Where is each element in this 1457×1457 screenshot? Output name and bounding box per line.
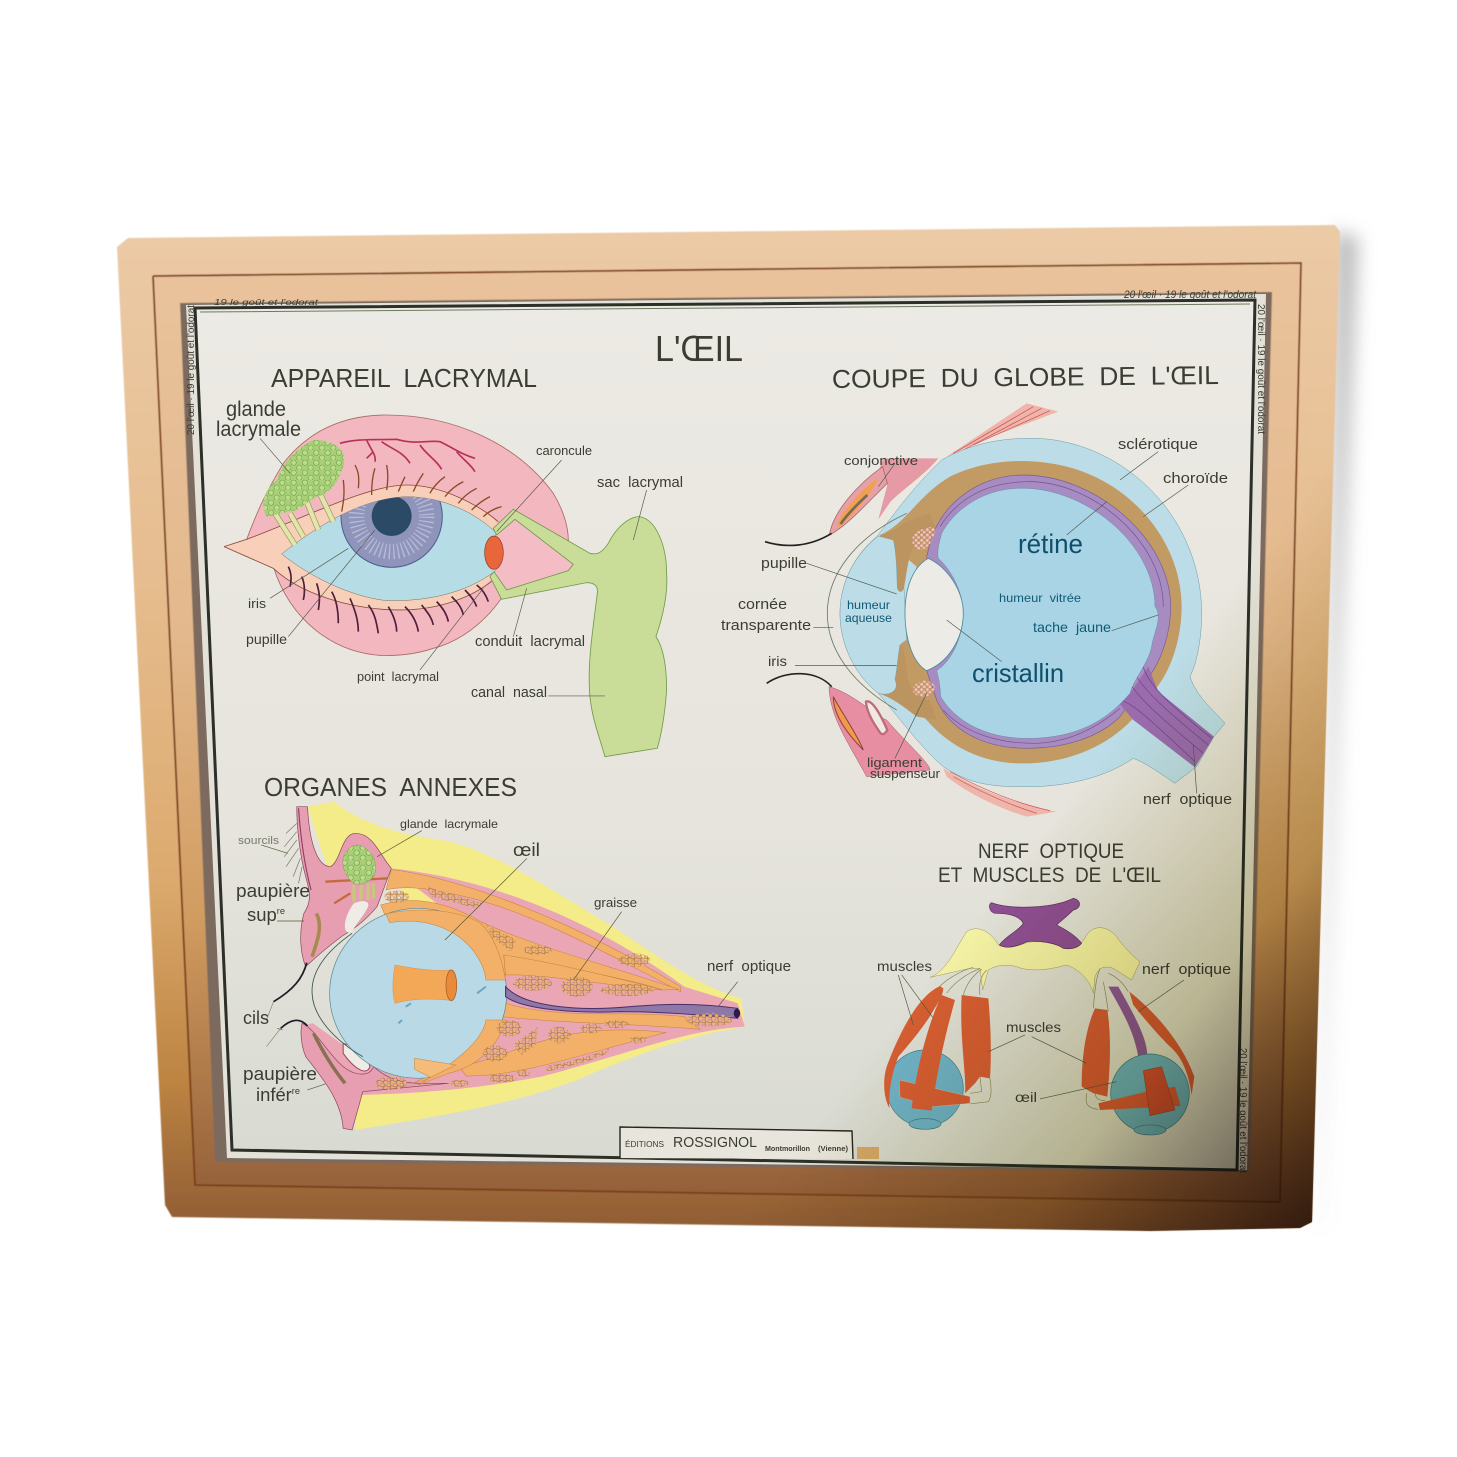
publisher box <box>620 1127 853 1159</box>
heading: nerf optique et muscles de l'oeil: ET MUSCLES DE L'ŒIL <box>938 864 1161 887</box>
label: caroncule: caroncule <box>536 444 592 458</box>
icon: caruncle <box>485 536 503 569</box>
leader lines <box>261 831 738 1090</box>
label: humeur aqueuse: aqueuse <box>845 611 892 625</box>
label: sac lacrymal: sac lacrymal <box>597 474 683 491</box>
publisher box: ROSSIGNOL <box>673 1134 757 1151</box>
label: paupiere sup: re <box>277 906 285 916</box>
label: ligament suspenseur: ligament <box>867 755 922 770</box>
label: nerf optique: nerf optique <box>1143 791 1232 808</box>
label: ligament suspenseur: suspenseur <box>870 766 941 781</box>
cornea line <box>827 513 907 710</box>
label: paupiere sup: sup <box>247 905 276 925</box>
lower eyelashes <box>288 567 488 633</box>
lighting overlay <box>796 521 1332 1231</box>
label: cils: cils <box>243 1008 269 1028</box>
frame shadow <box>1314 230 1358 1225</box>
label: tache jaune: tache jaune <box>1033 619 1111 635</box>
label: glande lacrymale: glande lacrymale <box>400 817 498 831</box>
sclera <box>840 438 1225 787</box>
orbital fat yellow <box>307 802 745 1130</box>
diagram: orbit section <box>261 802 745 1130</box>
blood vessels <box>340 439 475 472</box>
margin text: sides: 20 l'œil · 19 le goût et l'odorat <box>186 305 197 435</box>
label: nerf optique: nerf optique <box>707 959 791 975</box>
label: conjonctive: conjonctive <box>844 453 918 468</box>
label: choroide: choroïde <box>1163 470 1228 487</box>
heading: coupe du globe: COUPE DU GLOBE DE L'ŒIL <box>832 360 1219 394</box>
label: canal nasal: canal nasal <box>471 685 547 701</box>
label: cornee transparente: cornée <box>738 596 787 613</box>
lower eyelid <box>767 674 930 777</box>
label: humeur aqueuse <box>845 598 892 625</box>
adhesive tape scrap <box>857 1147 879 1159</box>
leader lines <box>260 438 647 696</box>
margin text: sides: 20 l'œil · 19 le goût et l'odorat <box>1237 1048 1248 1173</box>
upper lid tissue <box>297 807 391 967</box>
label: graisse: graisse <box>594 895 637 910</box>
optic nerve <box>1113 667 1214 767</box>
aqueous humour <box>840 536 907 694</box>
cornea line <box>312 933 363 1057</box>
optic nerve <box>506 987 738 1018</box>
heading: organes annexes: ORGANES ANNEXES <box>264 772 517 802</box>
right eye <box>1082 968 1194 1135</box>
label: nerf optique: nerf optique <box>1142 961 1231 978</box>
label: cristallin: cristallin <box>972 658 1064 688</box>
panel: organes annexes <box>236 772 791 1130</box>
eyeball <box>330 908 507 1078</box>
label: muscles left: muscles <box>877 958 932 974</box>
crystalline lens <box>905 558 963 671</box>
margin text: top: 20 l'œil · 19 le goût et l'odorat <box>1123 289 1257 301</box>
label: cornee transparente: transparente <box>721 617 811 634</box>
label: iris: iris <box>768 653 787 669</box>
orbit pink tissue <box>302 868 745 1130</box>
label: glande lacrymale <box>216 398 301 441</box>
lower lid tissue <box>301 1023 448 1130</box>
label: paupiere sup: paupière <box>236 881 310 901</box>
label: retine: rétine <box>1018 529 1083 559</box>
label: point lacrymal: point lacrymal <box>357 670 439 684</box>
panel: appareil lacrymal <box>216 363 683 757</box>
label: iris: iris <box>248 596 267 611</box>
wooden frame <box>117 225 1340 1231</box>
eyelashes <box>274 963 307 1028</box>
panel: nerf optique et muscles <box>877 840 1231 1135</box>
left eye <box>884 967 991 1129</box>
label: muscles centre: muscles <box>1006 1019 1061 1035</box>
diagram: chiasm and muscles <box>884 898 1194 1135</box>
margin text: top: 19 le goût et l'odorat <box>214 298 319 307</box>
margin text: sides: 20 l'œil · 19 le goût et l'odorat <box>1255 304 1266 434</box>
muscle bands <box>381 869 700 1083</box>
label: glande lacrymale: glande <box>226 398 286 421</box>
ciliary muscle <box>912 527 935 697</box>
optic chiasm <box>989 898 1082 949</box>
eyebrow hairs <box>284 823 302 883</box>
margin text: sides <box>186 304 1266 1173</box>
leader lines <box>795 452 1197 793</box>
upper eyelid <box>765 458 938 545</box>
upper eyelashes <box>342 465 502 517</box>
label: pupille: pupille <box>761 555 807 572</box>
label: paupiere infer: paupière <box>243 1064 317 1084</box>
label: ligament suspenseur <box>867 755 941 781</box>
poster paper <box>186 294 1266 1170</box>
label: humeur vitree: humeur vitrée <box>999 591 1081 605</box>
label: paupiere sup <box>236 881 310 925</box>
label: cornee transparente <box>721 596 811 634</box>
label: sclerotique: sclérotique <box>1118 436 1198 453</box>
diagram: eyeball section <box>765 403 1225 817</box>
muscles over eye <box>386 910 506 980</box>
vitreous humour <box>937 488 1158 738</box>
tear duct and nasal canal <box>490 509 667 757</box>
label: oeil: œil <box>513 840 540 860</box>
yellow tissue <box>930 928 1140 993</box>
publisher box: Montmorillon <box>765 1144 810 1153</box>
label: pupille: pupille <box>246 632 287 647</box>
eye muscles <box>943 403 1058 817</box>
label: paupiere infer <box>243 1064 317 1105</box>
label: sourcils: sourcils <box>238 835 280 847</box>
icon: iris and pupil <box>340 496 443 568</box>
main title: L'ŒIL <box>655 328 743 369</box>
choroid <box>878 461 1182 763</box>
ciliary and iris <box>878 513 937 720</box>
label: conduit lacrymal: conduit lacrymal <box>475 633 585 650</box>
publisher box: (Vienne) <box>818 1144 849 1153</box>
label: humeur aqueuse: humeur <box>847 598 890 612</box>
white conjunctival pocket <box>345 901 368 932</box>
fat clusters <box>375 887 732 1090</box>
heading: nerf optique et muscles de l'oeil: NERF OPTIQUE <box>978 840 1124 863</box>
heading: nerf optique et muscles de l'oeil <box>938 840 1161 887</box>
publisher box: ÉDITIONS <box>625 1139 664 1149</box>
panel: coupe du globe de l'oeil <box>721 360 1232 817</box>
label: paupiere infer: infér <box>256 1085 291 1105</box>
retina <box>927 475 1171 748</box>
lacrimal gland <box>325 845 388 903</box>
lacrimal gland <box>263 440 344 545</box>
inner muscle <box>393 965 456 1003</box>
diagram: eye and tear ducts <box>224 415 667 757</box>
label: oeil: œil <box>1015 1089 1037 1105</box>
label: glande lacrymale: lacrymale <box>216 418 301 441</box>
margin text: top <box>214 289 1257 307</box>
heading: appareil lacrymal: APPAREIL LACRYMAL <box>271 363 537 393</box>
leader lines <box>898 975 1184 1099</box>
label: paupiere infer: re <box>292 1086 300 1096</box>
